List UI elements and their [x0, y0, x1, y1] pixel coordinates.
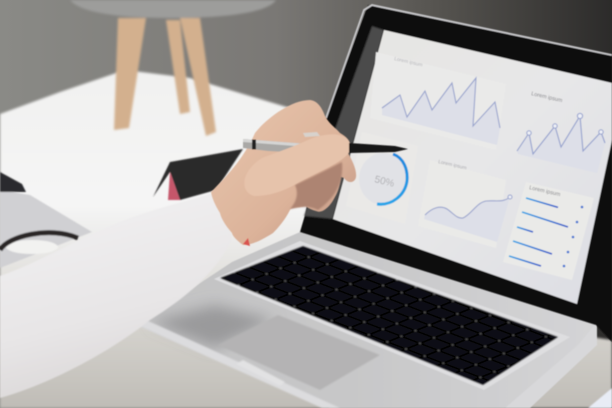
- panel: smooth curve chart: [418, 159, 512, 248]
- bars title: Lorem ipsum: [529, 185, 561, 198]
- sleeve: [0, 193, 232, 398]
- pen black section: [349, 143, 408, 153]
- screen surface: [333, 30, 612, 304]
- panel: line chart 1: [370, 52, 506, 150]
- base deck: [137, 232, 597, 408]
- panel: horizontal bars: [503, 182, 594, 280]
- arm in white sleeve: [0, 193, 232, 398]
- laptop lid: [300, 5, 612, 342]
- chart 2 title: Lorem ipsum: [531, 91, 563, 104]
- trackpad front notch: [236, 360, 285, 386]
- dark ring: [0, 233, 78, 250]
- house red wall: [168, 172, 180, 200]
- stool legs: [114, 18, 216, 136]
- nails: [243, 238, 250, 246]
- donut disc: [359, 153, 407, 205]
- palm and fingers: [211, 100, 356, 245]
- stool seat: [70, 0, 276, 18]
- stool in background: [70, 0, 276, 136]
- bars: [509, 198, 568, 266]
- palm rest shadow: [150, 305, 275, 348]
- keyboard: [220, 246, 558, 385]
- lid silver edge: [326, 5, 612, 118]
- donut value: 50%: [373, 174, 395, 190]
- notebook: [0, 190, 92, 268]
- notebook and glasses at left: [0, 172, 92, 268]
- panel: donut gauge: [346, 132, 418, 224]
- laptop base: [137, 232, 597, 408]
- pen silver section: [243, 139, 308, 153]
- chart 2 area: [517, 116, 605, 173]
- hand: [211, 100, 408, 246]
- chart 1 area: [382, 78, 500, 145]
- panel: line chart 2: [517, 91, 605, 173]
- chart 2 markers: [527, 113, 603, 135]
- chart 1 title: Lorem ipsum: [394, 56, 423, 68]
- trackpad: [218, 315, 380, 390]
- chart 2 line: [517, 116, 605, 154]
- right front side: [505, 322, 597, 408]
- bars card: [503, 182, 594, 280]
- ring highlight: [6, 240, 58, 254]
- black clip: [0, 172, 26, 192]
- donut arc: [377, 154, 407, 204]
- curve chart end marker: [508, 195, 512, 199]
- bar dots: [563, 206, 583, 267]
- toy house: [153, 149, 243, 200]
- front bright edge: [137, 320, 340, 408]
- curve chart area: [424, 197, 510, 242]
- screen: [333, 30, 612, 304]
- curve chart title: Lorem ipsum: [438, 159, 467, 171]
- thumb over pen: [244, 134, 350, 196]
- curve chart line: [425, 197, 510, 218]
- finger shadow: [290, 162, 342, 210]
- lid frame: [300, 5, 612, 342]
- small object at bottom right: [588, 388, 612, 408]
- chart 1 line: [382, 78, 500, 128]
- keyboard well rim: [214, 241, 570, 390]
- donut card: [346, 132, 418, 224]
- left bezel reflection: [304, 26, 384, 219]
- house roof: [153, 149, 243, 200]
- curve chart card: [418, 160, 506, 248]
- chart 1 card: [370, 52, 506, 150]
- gap between index finger and thumb: [303, 132, 320, 137]
